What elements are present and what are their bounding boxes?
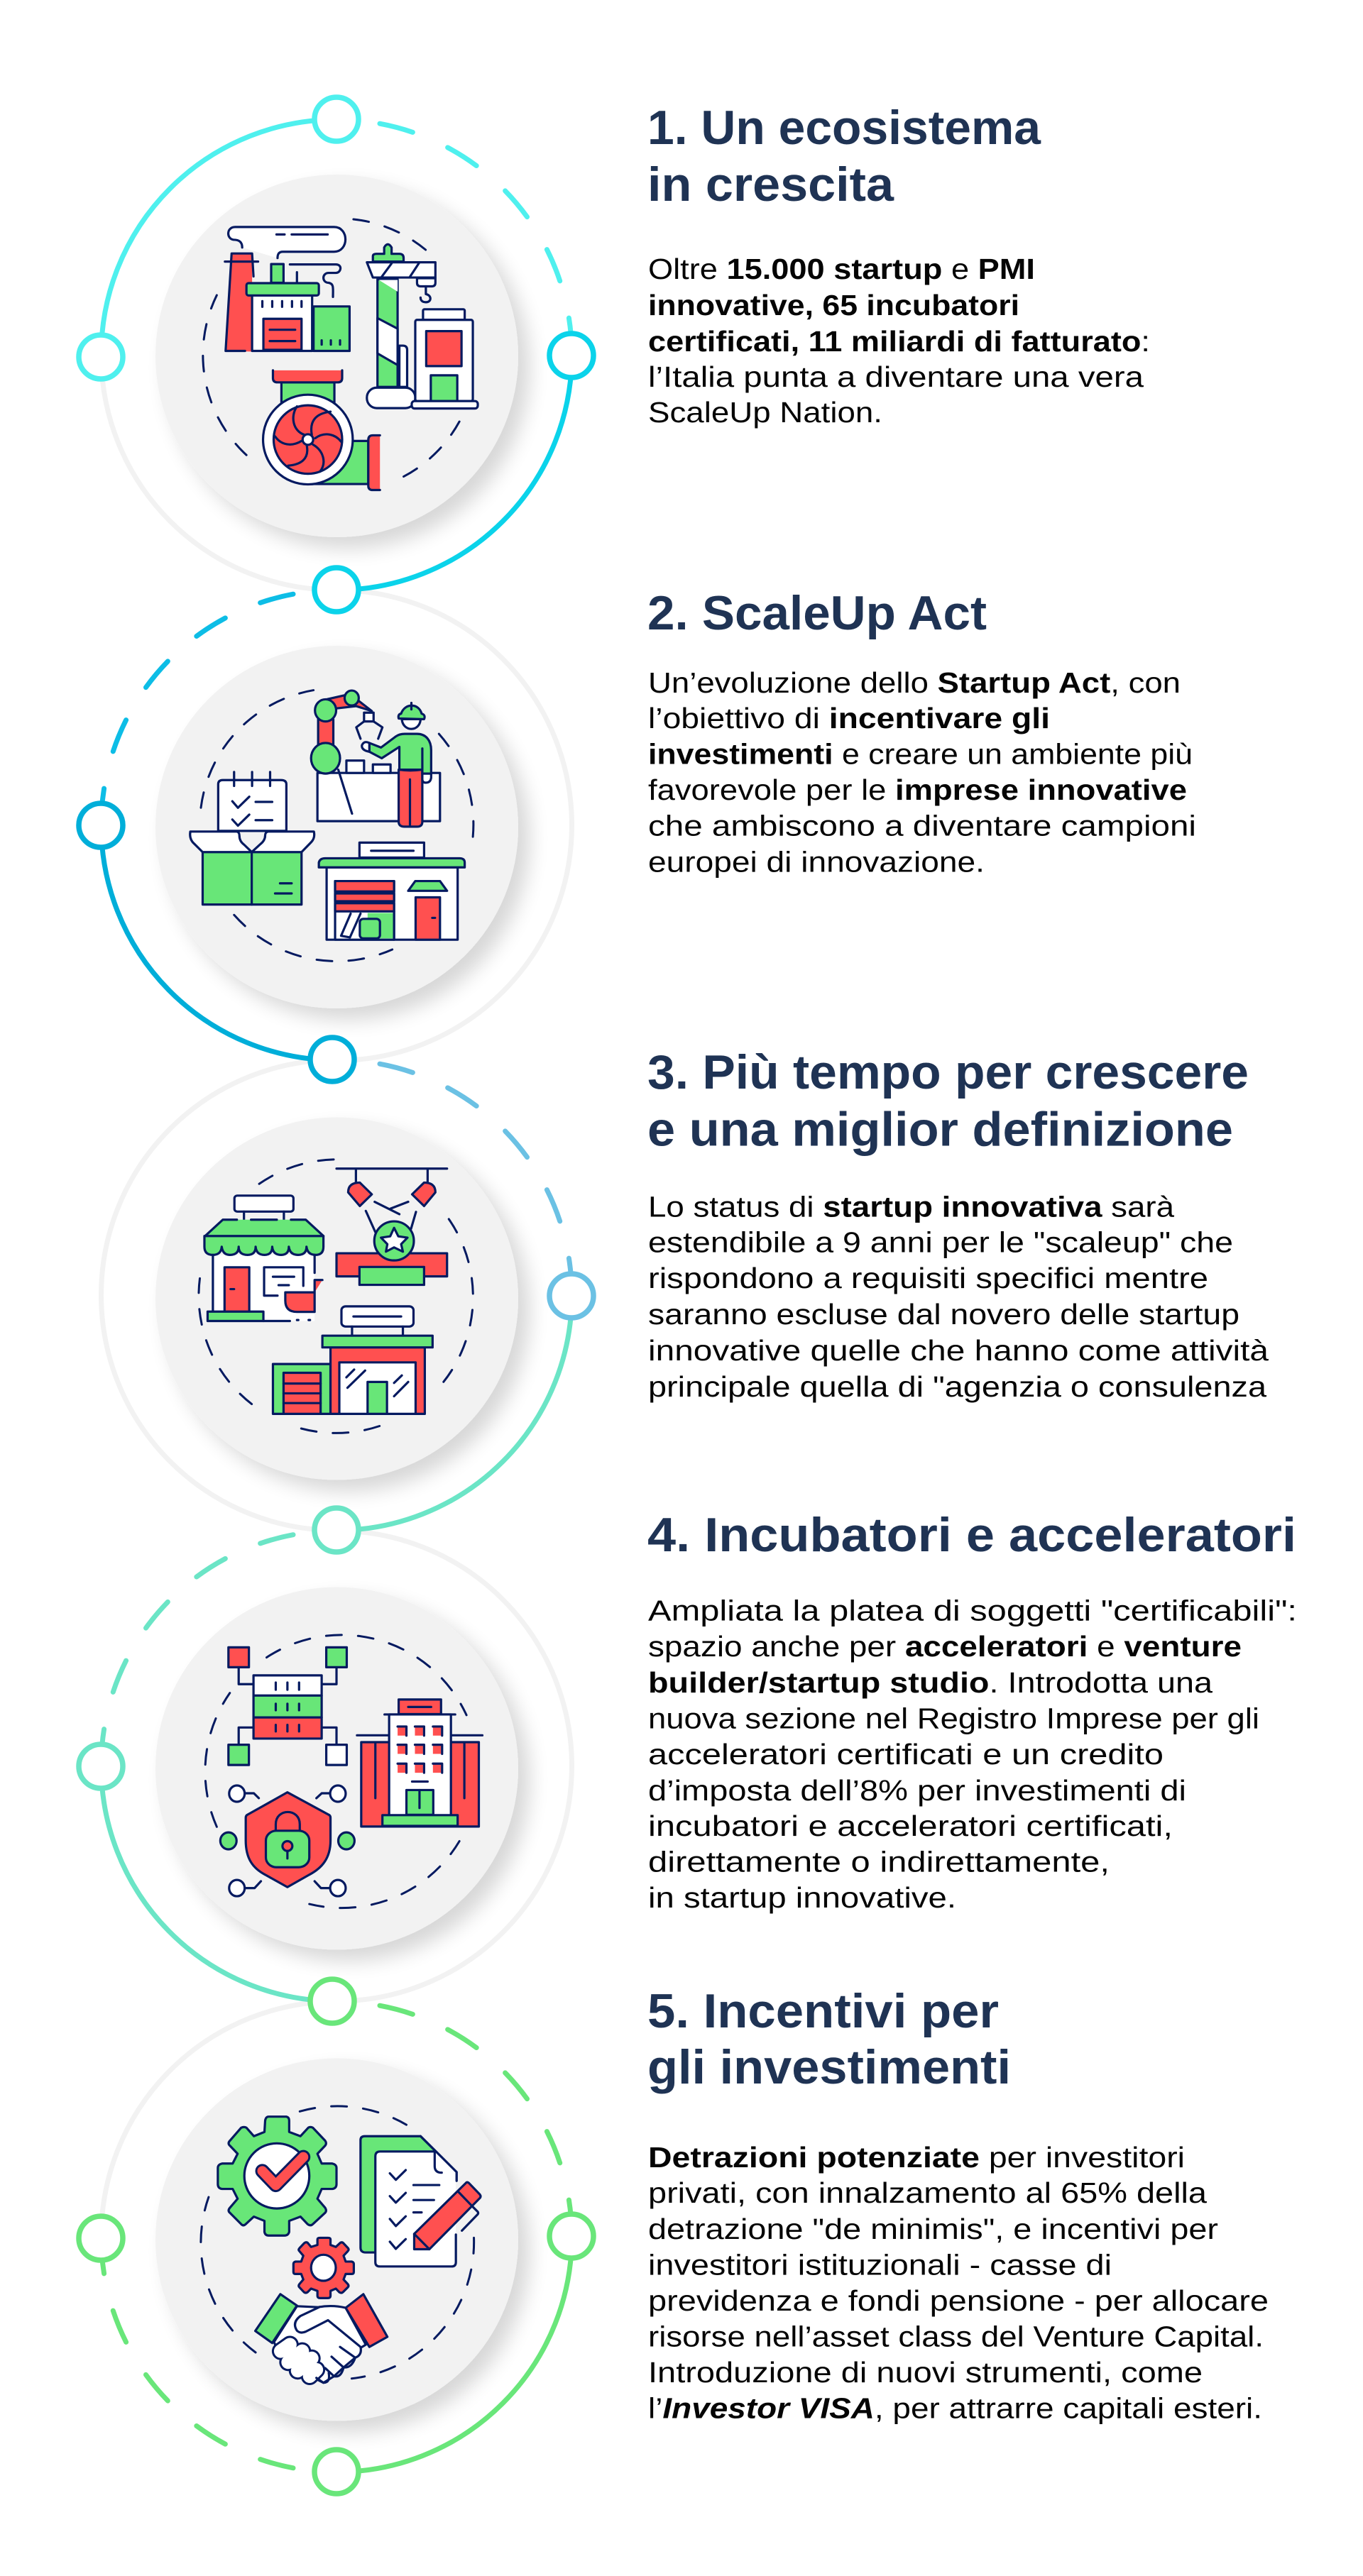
text block step 2: Un’evoluzione dello Startup Act , con bbox=[648, 666, 1181, 699]
timeline ring step 5 bbox=[79, 2001, 593, 2494]
text block step 1 bbox=[648, 253, 1150, 429]
text block step 2: che ambiscono a diventare campioni bbox=[648, 809, 1196, 842]
heading step 2: 2. ScaleUp Act bbox=[647, 586, 987, 640]
text block step 1: l’Italia punta a diventare una vera bbox=[648, 360, 1144, 393]
text block step 4 bbox=[648, 1594, 1297, 1914]
text block step 2: investimenti e creare un ambiente più bbox=[648, 738, 1193, 771]
text block step 1: Oltre 15.000 startup e PMI bbox=[648, 253, 1035, 285]
text block step 5 bbox=[648, 2141, 1269, 2424]
text block step 4: incubatori e acceleratori certificati, bbox=[648, 1810, 1173, 1842]
text block step 3: innovative quelle che hanno come attività bbox=[648, 1334, 1269, 1367]
heading step 1 bbox=[647, 101, 1041, 211]
timeline ring step 2 bbox=[79, 590, 572, 1081]
text block step 5: privati, con innalzamento al 65% della bbox=[648, 2176, 1207, 2209]
text block step 4: d’imposta dell’8% per investimenti di bbox=[648, 1774, 1186, 1807]
text block step 3 bbox=[648, 1191, 1269, 1403]
text block step 1: certificati, 11 miliardi di fatturato : bbox=[648, 325, 1150, 358]
icon: server network, shield and office bbox=[205, 1635, 482, 1908]
timeline ring step 1 bbox=[79, 97, 593, 612]
heading step 3: 3. Più tempo per crescere bbox=[647, 1045, 1249, 1099]
panel: step 3 più tempo per crescere bbox=[101, 1045, 1269, 1552]
heading step 5: gli investimenti bbox=[647, 2040, 1011, 2094]
text block step 4: in startup innovative. bbox=[648, 1881, 956, 1914]
icon: robot arm, worker, box and warehouse bbox=[190, 690, 474, 961]
text block step 4: nuova sezione nel Registro Imprese per gli bbox=[648, 1702, 1259, 1734]
panel: step 2 scaleup act bbox=[79, 586, 1196, 1081]
icon: shop, spotlight podium and store bbox=[199, 1160, 473, 1433]
grey disc step 3 bbox=[155, 1117, 518, 1480]
text block step 3: Lo status di startup innovativa sarà bbox=[648, 1191, 1174, 1223]
text block step 4: direttamente o indirettamente, bbox=[648, 1845, 1110, 1878]
heading step 5: 5. Incentivi per bbox=[647, 1984, 999, 2038]
heading step 4: 4. Incubatori e acceleratori bbox=[647, 1508, 1296, 1562]
text block step 2: l’obiettivo di incentivare gli bbox=[648, 702, 1050, 734]
text block step 4: builder/startup studio . Introdotta una bbox=[648, 1666, 1213, 1699]
timeline ring step 4 bbox=[79, 1531, 572, 2023]
text block step 4: spazio anche per acceleratori e venture bbox=[648, 1630, 1242, 1663]
text block step 1: innovative, 65 incubatori bbox=[648, 289, 1019, 321]
text block step 4: Ampliata la platea di soggetti "certificabili": bbox=[648, 1594, 1297, 1626]
heading step 1: in crescita bbox=[647, 158, 894, 211]
text block step 5: previdenza e fondi pensione - per allocare bbox=[648, 2284, 1269, 2317]
grey disc step 2 bbox=[155, 646, 518, 1008]
panel: step 5 incentivi per gli investimenti bbox=[79, 1984, 1269, 2494]
text block step 5: Introduzione di nuovi strumenti, come bbox=[648, 2356, 1203, 2389]
text block step 1: ScaleUp Nation. bbox=[648, 396, 882, 429]
text block step 5: investitori istituzionali - casse di bbox=[648, 2248, 1112, 2281]
panel: step 1 un ecosistema in crescita bbox=[79, 97, 1150, 612]
grey disc step 5 bbox=[155, 2058, 518, 2421]
grey disc step 4 bbox=[155, 1587, 518, 1950]
grey disc step 1 bbox=[155, 175, 518, 537]
text block step 3: principale quella di "agenzia o consulenza bbox=[648, 1370, 1266, 1403]
text block step 5: l’Investor VISA , per attrarre capitali esteri. bbox=[648, 2391, 1262, 2424]
text block step 2 bbox=[648, 666, 1196, 879]
text block step 4: acceleratori certificati e un credito bbox=[648, 1738, 1164, 1771]
icon: gears, checklist and handshake bbox=[201, 2106, 481, 2383]
heading step 5 bbox=[647, 1984, 1011, 2094]
text block step 5: risorse nell’asset class del Venture Capital. bbox=[648, 2321, 1264, 2353]
text block step 5: Detrazioni potenziate per investitori bbox=[648, 2141, 1185, 2174]
heading step 1: 1. Un ecosistema bbox=[647, 101, 1041, 155]
text block step 3: estendibile a 9 anni per le "scaleup" che bbox=[648, 1226, 1233, 1259]
heading step 3: e una miglior definizione bbox=[647, 1103, 1233, 1157]
icon: factory, crane and turbine bbox=[203, 219, 478, 490]
heading step 3 bbox=[647, 1045, 1249, 1157]
text block step 5: detrazione "de minimis", e incentivi per bbox=[648, 2213, 1218, 2245]
text block step 3: rispondono a requisiti specifici mentre bbox=[648, 1262, 1208, 1294]
text block step 3: saranno escluse dal novero delle startup bbox=[648, 1298, 1239, 1331]
panel: step 4 incubatori e acceleratori bbox=[79, 1508, 1297, 2023]
text block step 2: europei di innovazione. bbox=[648, 846, 985, 879]
timeline ring step 3 bbox=[101, 1060, 593, 1552]
text block step 2: favorevole per le imprese innovative bbox=[648, 774, 1187, 806]
